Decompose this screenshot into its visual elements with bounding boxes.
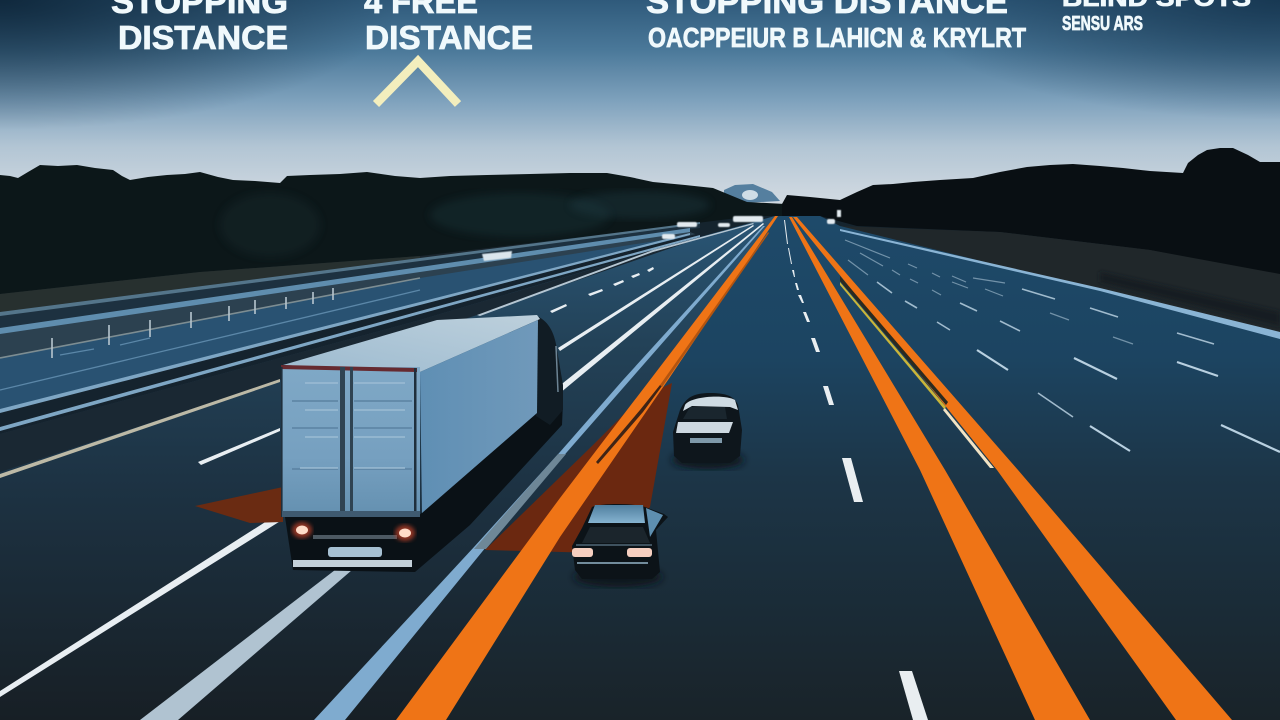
tree line: right — [782, 148, 1280, 276]
distant traffic — [662, 210, 841, 239]
grass verge: left — [0, 256, 420, 312]
median barrier wall — [0, 232, 700, 358]
near car roof — [588, 505, 645, 523]
caption under blind spots: SENSU ARS — [1062, 13, 1143, 35]
truck roof — [283, 315, 540, 372]
truck side panel — [420, 320, 538, 513]
near car side window — [646, 508, 663, 537]
crash barrier rails — [0, 233, 705, 434]
blind spot zone: truck right side — [485, 383, 672, 553]
lane slit: dark and yellow — [840, 276, 948, 405]
orange line: centre right — [789, 217, 1090, 720]
far car plate — [690, 438, 722, 443]
distant mountain — [724, 184, 780, 204]
truck tail lights — [292, 522, 415, 541]
far car shadow — [672, 451, 744, 469]
truck bumper — [293, 535, 412, 567]
right road edge line — [840, 229, 1280, 339]
truck rear doors — [281, 365, 420, 517]
lower carriageway surface — [0, 234, 700, 412]
fence rail and posts — [0, 278, 420, 358]
near car trim — [577, 562, 648, 564]
blue lane edge line — [314, 226, 765, 720]
upper rail — [0, 222, 700, 322]
icon: chevron arrow — [376, 61, 458, 104]
near car tail lights — [572, 548, 652, 557]
far car roof — [683, 397, 738, 411]
far car body — [673, 393, 742, 463]
tree line: left — [0, 165, 785, 294]
dark shoulder beside barrier — [0, 238, 700, 472]
truck — [281, 315, 563, 572]
centre lane dashes — [784, 220, 928, 720]
grass verge: right — [840, 226, 1280, 335]
distant glare on carriageway — [482, 251, 512, 261]
parallel carriageway — [0, 222, 700, 412]
near car rear window — [582, 527, 650, 543]
heading: free distance second line: DISTANCE — [365, 19, 533, 56]
car: near — [572, 504, 668, 587]
far car trunk — [676, 422, 733, 433]
main road surface: left lanes — [0, 216, 775, 720]
car: far — [672, 393, 744, 469]
far road strip — [0, 228, 690, 340]
orange line: far right — [793, 217, 1232, 720]
truck cab — [536, 316, 563, 425]
caption under stopping distance: OACPPEIUR B LAHICN & KRYLRT — [648, 22, 1026, 53]
near car shadow — [574, 567, 662, 587]
heading: stopping distance second line: DISTANCE — [118, 19, 288, 56]
truck shadow and undercarriage — [285, 402, 563, 572]
blind spot zone: truck rear left — [195, 487, 283, 523]
orange line: left — [396, 216, 778, 720]
near car body — [572, 504, 668, 579]
right lane dashes — [845, 240, 1280, 452]
main road surface: centre and right lanes — [396, 216, 1280, 720]
far car rear window — [683, 407, 727, 419]
sky — [0, 0, 1280, 244]
truck mirror highlight — [556, 346, 558, 392]
left lane lines — [0, 223, 764, 720]
